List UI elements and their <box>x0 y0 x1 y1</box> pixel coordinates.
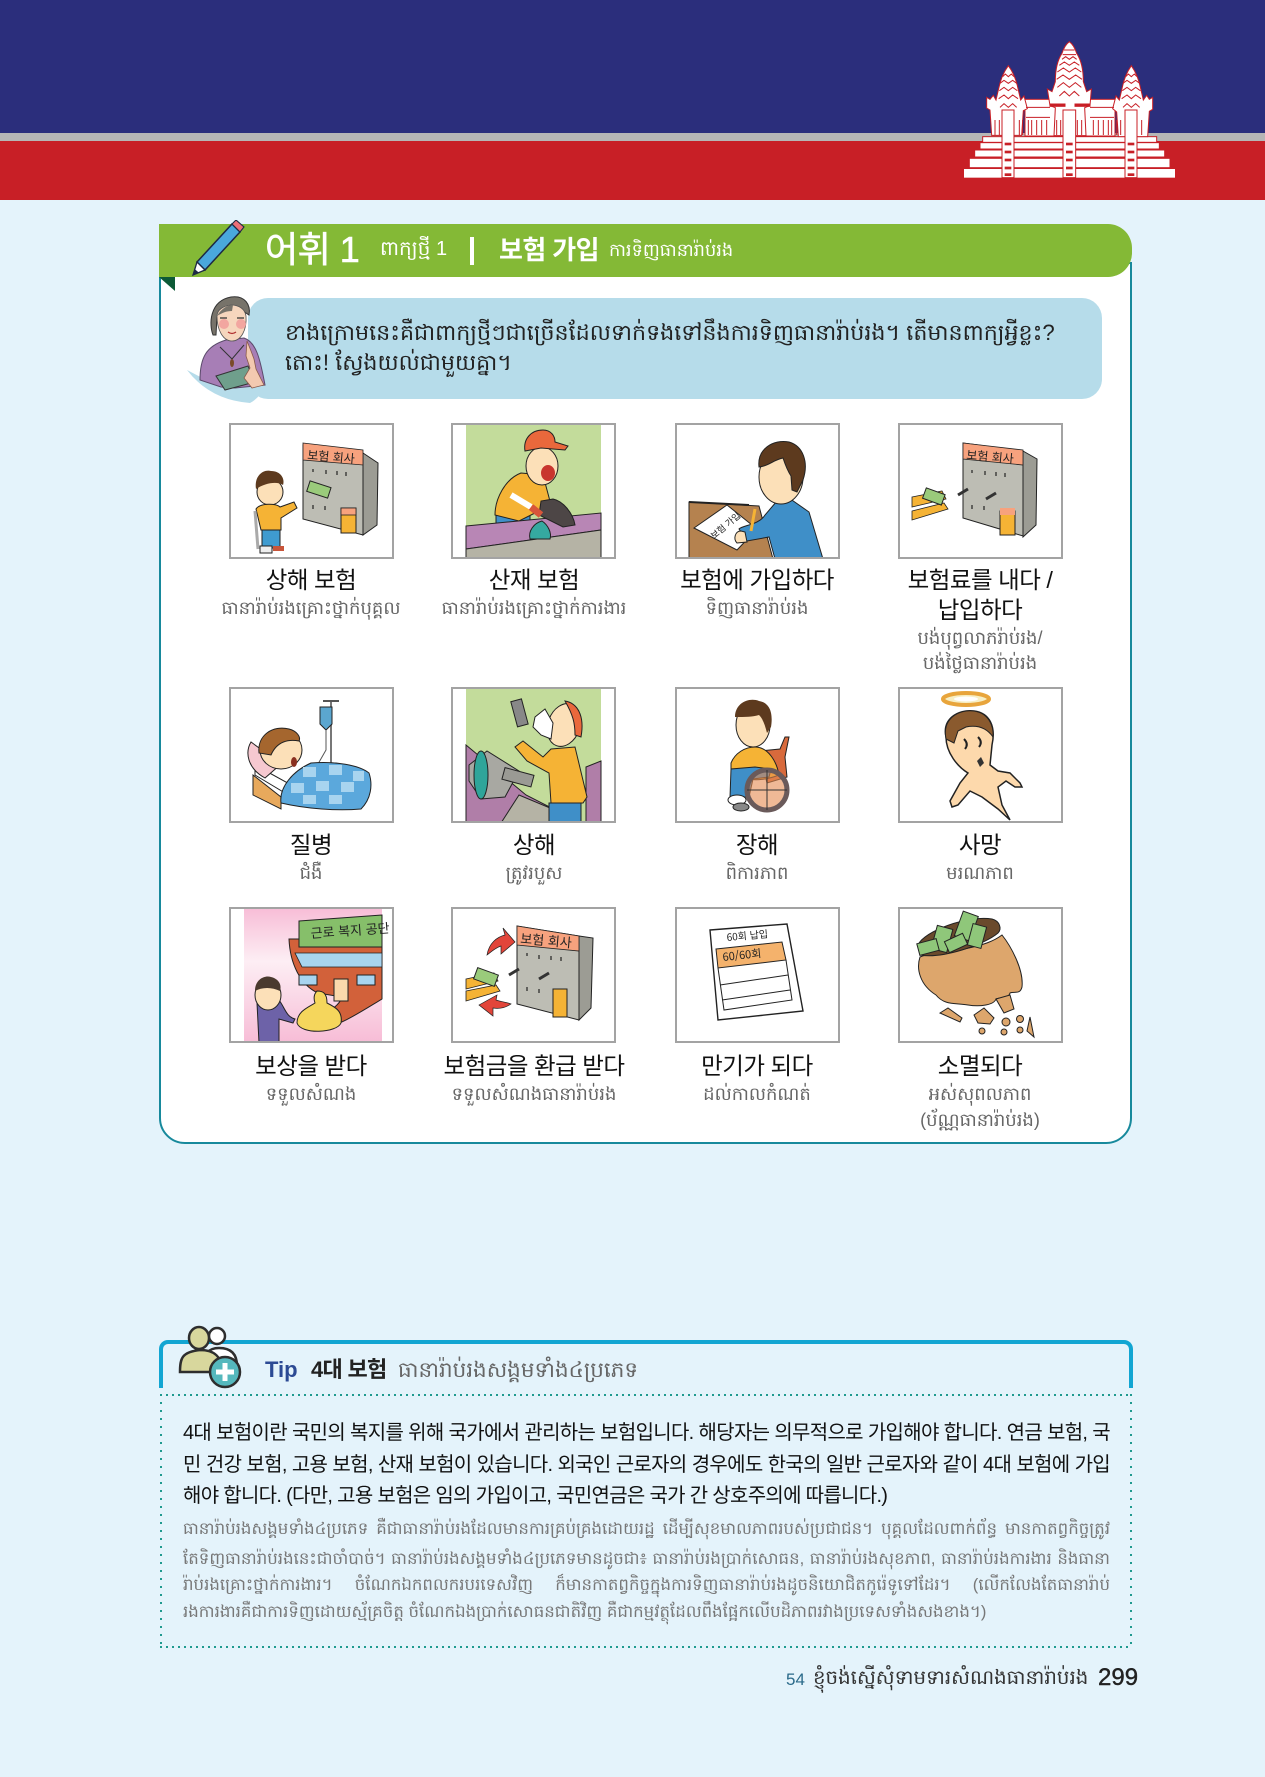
picture: insurance refund <box>451 907 616 1043</box>
text: 민 건강 보험, 고용 보험, 산재 보험이 있습니다. 외국인 근로자의 경우에도 한국의 일반 근로자와 같이 4대 보험에 가입 <box>183 1454 1110 1476</box>
picture: man signing insurance form: 보험 가입 <box>707 509 743 542</box>
caption: ធានារ៉ាប់រងគ្រោះថ្នាក់បុគ្គល <box>222 598 400 618</box>
picture: worker hit in machinery accident <box>451 687 616 823</box>
vocabulary card 5 <box>229 687 394 883</box>
caption: ជំងឺ <box>300 863 322 883</box>
icon: people with plus <box>178 1326 242 1388</box>
vocabulary card 6 <box>451 687 616 885</box>
text block: Khmer explanation <box>183 1518 1110 1624</box>
speech bubble <box>248 298 1102 399</box>
caption: 질병 <box>290 832 332 858</box>
caption <box>701 1053 813 1104</box>
caption: 납입하다 <box>938 597 1022 623</box>
picture: person by insurance company: 보험 회사 <box>307 446 355 467</box>
caption: 만기가 되다 <box>701 1053 813 1079</box>
picture: soul with halo <box>898 687 1063 823</box>
heading bar: vocabulary 1 <box>159 224 1132 277</box>
caption <box>443 1053 625 1106</box>
heading: 보험 가입: 보험 가입 <box>499 235 599 265</box>
icon: Angkor Wat temple <box>964 41 1175 178</box>
fold triangle <box>159 277 175 291</box>
icon: pencil <box>192 220 245 276</box>
vocabulary card 1 <box>222 423 400 620</box>
caption: 보험금을 환급 받다 <box>443 1053 625 1079</box>
footer: chapter title: ខ្ញុំចង់ស្នើសុំទាមទារសំណងធានារ៉ាប់រង <box>813 1667 1088 1689</box>
vocabulary card 9 <box>229 907 394 1106</box>
bubble text: តោះ! ស្វែងយល់ជាមួយគ្នា។ <box>285 350 512 375</box>
footer: chapter number: 54 <box>786 1670 805 1689</box>
caption: 소멸되다 <box>938 1053 1022 1079</box>
text: 해야 합니다. (다만, 고용 보험은 임의 가입이고, 국민연금은 국가 간 상호주의에 따릅니다.) <box>183 1485 887 1507</box>
heading Khmer subtitle: ការទិញធានារ៉ាប់រង <box>609 240 733 260</box>
caption: ត្រូវរបួស <box>506 863 562 883</box>
vocabulary card 8 <box>898 687 1063 883</box>
picture: insurance refund: 보험 회사 <box>520 928 573 951</box>
heading: tip: Tip <box>265 1357 298 1382</box>
caption <box>920 1053 1040 1130</box>
text: 4대 보험이란 국민의 복지를 위해 국가에서 관리하는 보험입니다. 해당자는 의무적으로 가입해야 합니다. 연금 보험, 국 <box>183 1422 1110 1444</box>
picture: receiving compensation <box>229 907 394 1043</box>
caption: ទទួលសំណងធានារ៉ាប់រង <box>452 1084 616 1104</box>
text: រ៉ាប់រងគ្រោះថ្នាក់ការងារ។ ចំណែកឯកពលករបរទេសវិញ ក៏មានកាតព្វកិច្ចក្នុងការទិញធានារ៉ាប់រងដូចនិយោជិតកូរ៉េទូទៅដែរ។ (លើកលែងតែធានារ៉ាប់ <box>183 1575 1110 1594</box>
caption <box>506 832 562 885</box>
footer: page number: 299 <box>1098 1664 1138 1691</box>
caption <box>680 567 834 618</box>
caption <box>726 832 788 883</box>
caption: 사망 <box>959 832 1001 858</box>
caption: (ប័ណ្ណធានារ៉ាប់រង) <box>920 1110 1040 1130</box>
panel: tip body dotted frame <box>160 1394 1132 1648</box>
caption: ទិញធានារ៉ាប់រង <box>706 598 808 618</box>
caption: 산재 보험 <box>489 567 579 593</box>
heading Khmer: four social insurances: ធានារ៉ាប់រងសង្គមទាំង៤ប្រភេទ <box>398 1358 638 1382</box>
text: តែទិញធានារ៉ាប់រងនេះជាចាំបាច់។ ធានារ៉ាប់រងសង្គមទាំង៤ប្រភេទមានដូចជា៖ ធានារ៉ាប់រងប្រាក់សោធន, ធានារ៉ាប់រងសុខភាព, ធានារ៉ាប់រងការងារ និងធានា <box>183 1549 1110 1568</box>
vocabulary card 11 <box>675 907 840 1104</box>
icon: teacher <box>187 296 266 403</box>
caption <box>908 567 1053 674</box>
caption: មរណភាព <box>946 863 1014 883</box>
caption <box>290 832 332 883</box>
picture: receiving compensation: 근로 복지 공단 <box>310 918 390 942</box>
picture: payment document at maturity: 60/60회 <box>722 945 762 965</box>
picture: man in wheelchair <box>675 687 840 823</box>
caption: 상해 <box>513 832 555 858</box>
caption <box>442 567 626 618</box>
caption <box>255 1053 367 1106</box>
picture: payment document at maturity <box>675 907 840 1043</box>
caption: ដល់កាលកំណត់ <box>703 1084 811 1104</box>
picture: worker accident <box>451 423 616 559</box>
caption <box>222 567 400 620</box>
caption: ទទួលសំណង <box>266 1084 356 1104</box>
picture: man signing insurance form <box>675 423 840 559</box>
heading divider <box>470 237 474 265</box>
caption: 보험료를 내다 / <box>908 567 1052 593</box>
picture: sick patient in bed <box>229 687 394 823</box>
picture: crumbling money bag <box>898 907 1063 1043</box>
caption: 보상을 받다 <box>255 1053 367 1079</box>
vocabulary card 4 <box>898 423 1063 674</box>
caption <box>946 832 1014 883</box>
caption: បង់ថ្លៃធានារ៉ាប់រង <box>923 653 1037 673</box>
panel: tip frame <box>159 1340 1133 1388</box>
vocabulary card 2 <box>442 423 626 618</box>
vocabulary card 7 <box>675 687 840 883</box>
caption: បង់បុព្វលាភរ៉ាប់រង/ <box>918 628 1042 648</box>
heading: 4대 보험: 4대 보험 <box>311 1357 387 1382</box>
caption: 장해 <box>736 832 778 858</box>
picture: payment document at maturity: 60회 납입 <box>726 925 769 944</box>
caption: អស់សុពលភាព <box>929 1084 1031 1104</box>
vocabulary card 10 <box>443 907 625 1106</box>
text block: Korean explanation <box>183 1422 1110 1507</box>
caption: ធានារ៉ាប់រងគ្រោះថ្នាក់ការងារ <box>442 598 626 618</box>
header band: Cambodian flag colours <box>0 0 1265 200</box>
caption: 보험에 가입하다 <box>680 567 834 593</box>
picture: person by insurance company <box>229 423 394 559</box>
caption: 상해 보험 <box>266 567 356 593</box>
bubble text <box>285 318 1055 377</box>
vocabulary card 12 <box>898 907 1063 1130</box>
heading Khmer: ពាក្យថ្មី 1 <box>380 238 447 260</box>
picture: paying premium at insurance company <box>898 423 1063 559</box>
heading: 어휘 1: 어휘 1 <box>265 229 359 270</box>
vocabulary card 3 <box>675 423 840 618</box>
bubble text: ខាងក្រោមនេះគឺជាពាក្យថ្មីៗជាច្រើនដែលទាក់ទងទៅនឹងការទិញធានារ៉ាប់រង។ តើមានពាក្យអ្វីខ្លះ? <box>285 320 1055 345</box>
panel: vocabulary card <box>159 262 1132 1144</box>
text: ធានារ៉ាប់រងសង្គមទាំង៤ប្រភេទ គឺជាធានារ៉ាប់រងដែលមានការគ្រប់គ្រងដោយរដ្ឋ ដើម្បីសុខមាលភាពរបស់ប្រជាជន។ បុគ្គលដែលពាក់ព័ន្ធ មានកាតព្វកិច្ចត្រូវ <box>183 1519 1110 1538</box>
picture: paying premium at insurance company: 보험 회사 <box>966 446 1014 467</box>
caption: ពិការភាព <box>726 863 788 883</box>
text: រងការងារគឺជាការទិញដោយស្ម័គ្រចិត្ត ចំណែកឯងប្រាក់សោធនជាតិវិញ គឺជាកម្មវត្ថុដែលពឹងផ្អែកលើបដិភាពរវាងប្រទេសទាំងសងខាង។) <box>183 1602 986 1621</box>
